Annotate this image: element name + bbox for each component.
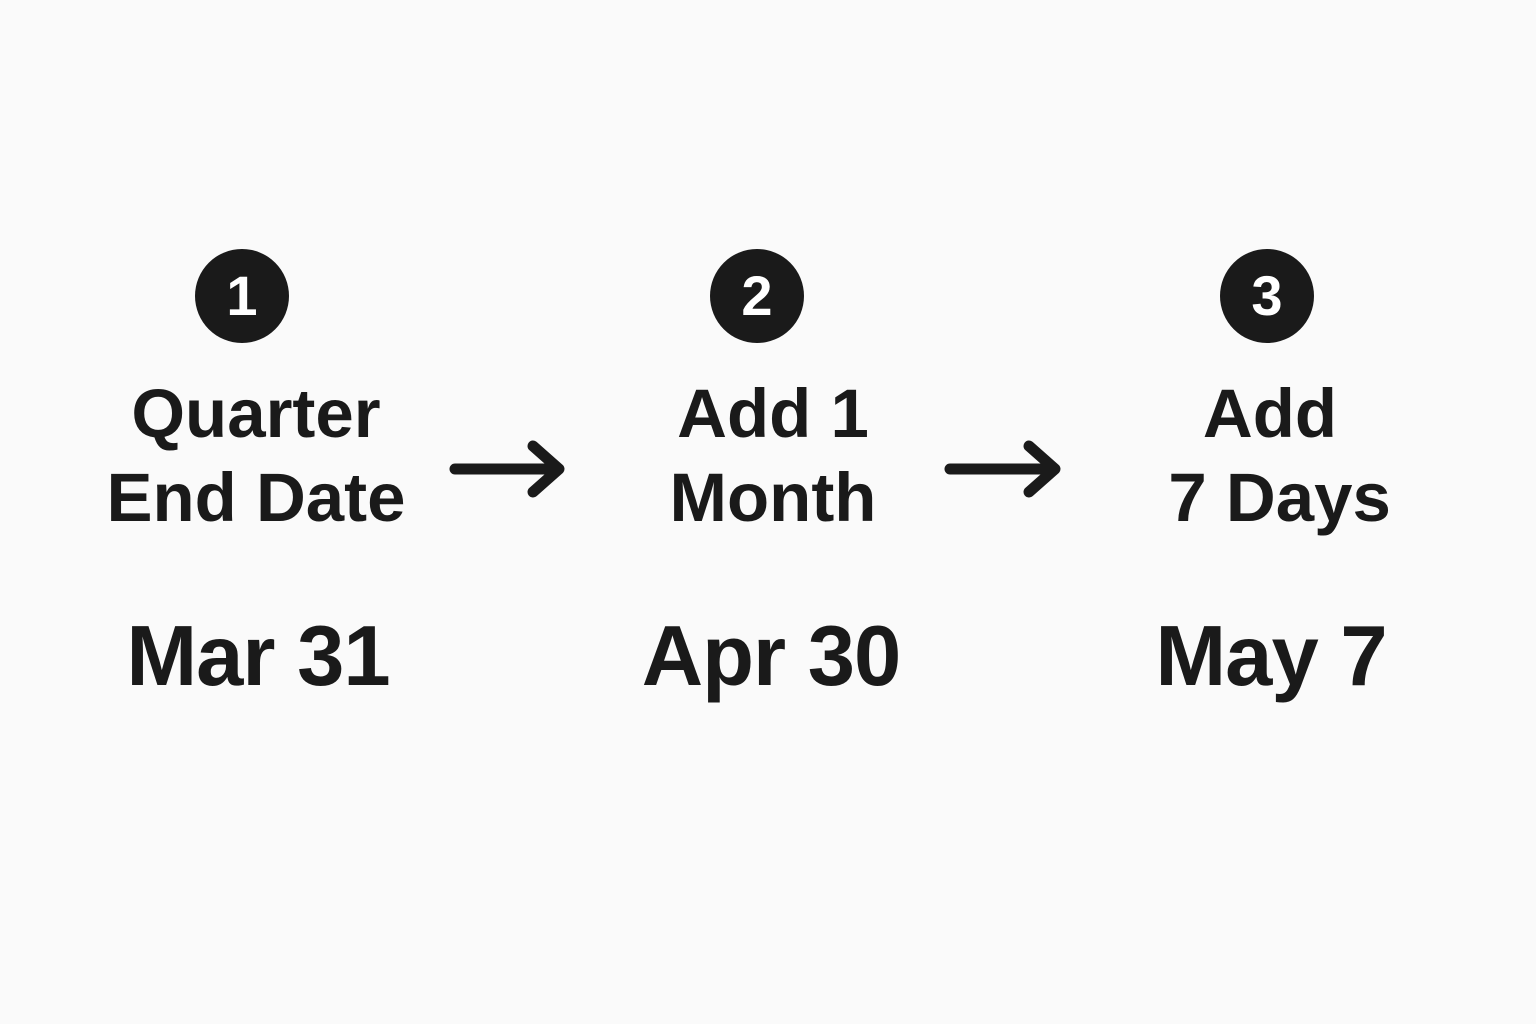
step 1 label: Quarter: [131, 375, 381, 452]
step 1 circle: 1: [226, 264, 258, 327]
step 3 label: 7 Days: [1168, 459, 1391, 536]
arrow 2: [950, 446, 1055, 492]
arrow 1: [455, 446, 559, 492]
step 3 label: Add: [1203, 375, 1337, 452]
step 2 circle: [710, 249, 804, 343]
step 3 circle: [1220, 249, 1314, 343]
step 1 label: End Date: [106, 459, 406, 536]
step 1 circle: [195, 249, 289, 343]
step 2 label: [670, 375, 876, 536]
step 1 date: Mar 31: [126, 609, 390, 704]
step 3 label: [1168, 375, 1391, 536]
step 2 date: Apr 30: [642, 609, 900, 704]
step 3 circle: 3: [1251, 264, 1283, 327]
step 3 date: May 7: [1155, 609, 1387, 704]
step 2 circle: 2: [741, 264, 773, 327]
step 2 label: Add 1: [677, 375, 869, 452]
step 1 label: [106, 375, 406, 536]
step 2 label: Month: [670, 459, 876, 536]
